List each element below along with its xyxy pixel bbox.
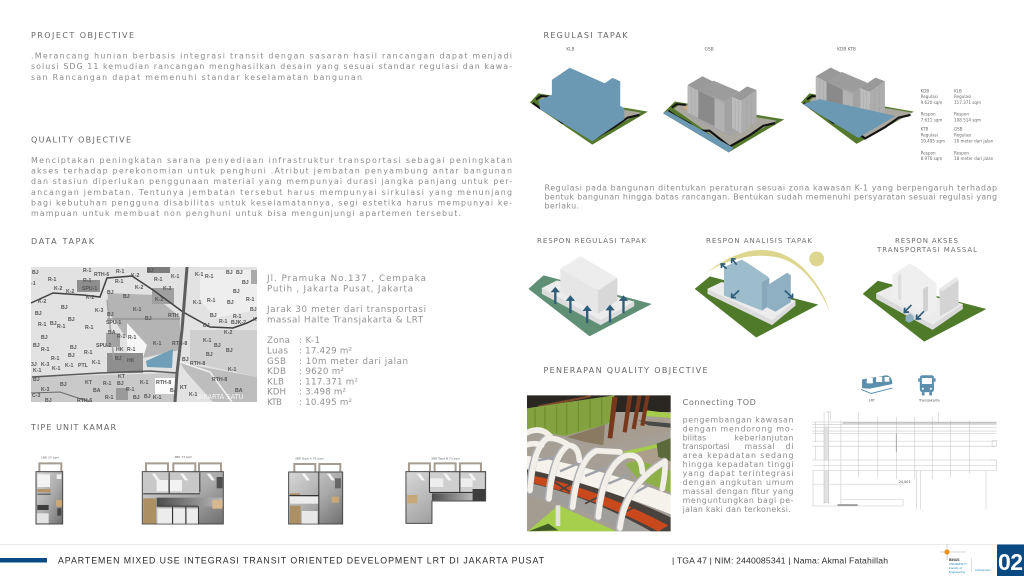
text block: connecting TOD description: yang dapat terintegrasi bbox=[683, 469, 794, 478]
map: site zoning: BJ bbox=[233, 289, 240, 295]
heading: respon akses transportasi massal bbox=[876, 237, 977, 254]
map: site zoning: SPU-2 bbox=[96, 343, 111, 349]
text block: site data list bbox=[267, 336, 408, 408]
map: site zoning: R-1 bbox=[117, 334, 125, 340]
text block: connecting TOD description: pengembangan kawasan bbox=[683, 415, 794, 424]
text block: site address and distance bbox=[266, 274, 426, 325]
text block: site data list: KDH bbox=[267, 388, 286, 398]
map: site zoning: R-1 bbox=[115, 279, 123, 285]
text block: connecting TOD description: hingga kepadatan tinggi bbox=[683, 460, 794, 469]
model: KLB bbox=[530, 46, 648, 145]
map: site zoning: R-1 bbox=[127, 347, 135, 353]
text block: connecting TOD description: menguntungkan bagi pe- bbox=[683, 496, 794, 505]
heading: penerapan quality objective: PENERAPAN QUALITY OBJECTIVE bbox=[544, 366, 708, 375]
map: site zoning: BJ bbox=[68, 317, 75, 323]
map: site zoning: K-1 bbox=[171, 274, 179, 280]
floor plans bbox=[36, 455, 486, 524]
map: site zoning: BJ bbox=[117, 381, 124, 387]
table: regulation values: Regulasi bbox=[954, 94, 971, 99]
floor plan: unit 4: 3BR Type B 73 sqm bbox=[431, 457, 460, 461]
model: KDB KTB: KDB KTB bbox=[837, 46, 856, 52]
map: site zoning: K-1 bbox=[193, 300, 201, 306]
map: site zoning: BJ bbox=[226, 348, 233, 354]
text block: project objective body: .Merancang hunian berbasis integrasi transit dengan sasaran hasil rancangan dapat menjadi bbox=[31, 52, 512, 61]
text block: regulation description: bentuk bangunan hingga batas rancangan. Bentukan sudah memenuhi persyaratan sesuai regulasi yang bbox=[544, 192, 997, 202]
map: site zoning: HK bbox=[116, 347, 124, 353]
map: site zoning: BJ bbox=[236, 270, 243, 276]
diagram: respon akses transportasi bbox=[863, 264, 986, 342]
map: site zoning: K-3 bbox=[41, 362, 49, 368]
map: site zoning: K-2 bbox=[135, 285, 143, 291]
map: site zoning: K-1 bbox=[153, 341, 161, 347]
map: site zoning: K-2 bbox=[131, 273, 139, 279]
map: site zoning: BJ bbox=[250, 307, 257, 313]
map: site zoning: R-1 bbox=[128, 335, 136, 341]
panel: respon diagrams bbox=[528, 237, 986, 342]
map: site zoning: SPU-1 bbox=[106, 320, 121, 326]
map: site zoning: BJ bbox=[182, 357, 189, 363]
table: regulation values: 10 meter dari jalan bbox=[954, 139, 994, 144]
model: GSB bbox=[663, 46, 784, 152]
label: dimension: 24,001 bbox=[899, 480, 911, 484]
map: site zoning: BJ bbox=[50, 321, 57, 327]
table: regulation values: KTB bbox=[921, 127, 928, 132]
map: site zoning: BJ bbox=[206, 352, 213, 358]
floor plan: unit 2: 3BR 73 sqm bbox=[174, 455, 192, 459]
map: site zoning: R-1 bbox=[85, 325, 93, 331]
text block: connecting TOD description: massal bbox=[744, 442, 775, 451]
map: site zoning: K bbox=[253, 317, 257, 323]
text block: site address and distance: Jl. Pramuka No.137 , Cempaka bbox=[266, 274, 426, 284]
heading: connecting TOD: Connecting TOD bbox=[683, 398, 756, 407]
text block: quality objective body: ancangan jembatan. Tentunya jembatan tersebut harus mempunyai sirkulasi yang menunjang bbox=[31, 188, 512, 197]
heading: respon akses transportasi massal: RESPON AKSES bbox=[895, 237, 959, 245]
map: site zoning: BJ bbox=[33, 377, 40, 383]
map: site zoning: BJ bbox=[107, 290, 114, 296]
map: site zoning: R-1 bbox=[48, 277, 56, 283]
text block: site data list: : 17.429 m² bbox=[299, 346, 352, 356]
text block: project objective body: solusi SDG 11 kemudian rancangan menghasilkan desain yang sesuai standar regulasi dan kawa- bbox=[31, 62, 512, 71]
table: regulation values: Respon bbox=[954, 150, 969, 155]
map: site zoning: SPU-1 bbox=[82, 286, 97, 292]
map: site zoning: JAKARTA SATU bbox=[196, 393, 244, 401]
table: regulation values: 18 meter dari jalan bbox=[954, 156, 994, 161]
table: regulation values: Regulasi bbox=[921, 133, 938, 138]
text block: connecting TOD description: di bbox=[785, 442, 794, 451]
text block: connecting TOD description: jalan kaki dan terkoneksi. bbox=[682, 505, 791, 514]
map: site zoning: R-1 bbox=[246, 297, 254, 303]
map: site zoning: 3J bbox=[31, 362, 37, 368]
text block: connecting TOD description: bilitas bbox=[683, 433, 706, 442]
map: site zoning: BJ bbox=[33, 343, 40, 349]
label: LRT: LRT bbox=[869, 399, 876, 403]
map: site zoning: BJ bbox=[210, 313, 217, 319]
panel: penerapan quality objective bbox=[525, 366, 996, 534]
table: regulation values: 8.976 sqm bbox=[921, 156, 942, 161]
map: site zoning: BJ bbox=[68, 353, 75, 359]
table: regulation values: 108.514 sqm bbox=[954, 117, 981, 122]
text block: connecting TOD description bbox=[682, 415, 794, 514]
map: site zoning: K-2 bbox=[38, 299, 46, 305]
logo: BINUS University bbox=[940, 544, 991, 574]
text block: quality objective body: dan stasiun diperlukan penggunaan material yang mempunyai durasi jangka panjang untuk per- bbox=[31, 177, 512, 186]
footer accent bar bbox=[0, 558, 47, 562]
table: regulation values: Respon bbox=[954, 112, 969, 117]
text block: site address and distance: Putih , Jakarta Pusat, Jakarta bbox=[267, 284, 413, 294]
map: site zoning: RTH-6 bbox=[77, 398, 92, 404]
map: site zoning: K-1 bbox=[228, 367, 236, 373]
table: regulation values: 117.371 sqm bbox=[954, 100, 981, 105]
text block: project objective body bbox=[31, 52, 512, 82]
map: site zoning: K-1 bbox=[92, 360, 100, 366]
logo: BINUS University: UNIVERSITY bbox=[949, 562, 967, 566]
drawing: bridge section bbox=[812, 412, 996, 509]
text block: project objective body: san Rancangan dapat memenuhi standar keselamatan bangunan bbox=[31, 73, 362, 82]
table: regulation values: 9.620 sqm bbox=[921, 100, 942, 105]
floor plan: unit 1: 1BR 37 sqm bbox=[41, 455, 59, 459]
map: site zoning: K-1 bbox=[65, 363, 73, 369]
map: site zoning: K-1 bbox=[203, 338, 211, 344]
site highlight bbox=[146, 349, 173, 368]
text block: site data list: KDB bbox=[267, 367, 286, 377]
panel: project objective bbox=[31, 31, 512, 82]
text block: site data list: KLB bbox=[267, 377, 284, 387]
map: site zoning: K-1 bbox=[140, 380, 148, 386]
panel: tipe unit kamar bbox=[30, 423, 486, 524]
table: regulation values: Respon bbox=[921, 112, 936, 117]
map: site zoning: K-3 bbox=[95, 308, 103, 314]
map: site zoning: RTH bbox=[168, 313, 179, 319]
heading: project objective: PROJECT OBJECTIVE bbox=[31, 31, 134, 40]
map: site zoning: C-3 bbox=[32, 393, 40, 399]
map: site zoning: R-1 bbox=[84, 350, 92, 356]
map: site zoning: R-1 bbox=[219, 319, 227, 325]
table: regulation values: 7.611 sqm bbox=[921, 117, 942, 122]
map: site zoning: -1 bbox=[31, 281, 36, 287]
map: site zoning: PTL bbox=[78, 363, 89, 369]
map: site zoning: BJ bbox=[226, 270, 233, 276]
map: site zoning: R-1 bbox=[83, 268, 91, 274]
text block: quality objective body: mampuan untuk membuat non penghuni untuk bisa mengunjungi apartemen tersebut. bbox=[31, 209, 461, 218]
text block: site data list: GSB bbox=[267, 357, 286, 367]
map: site zoning: KT bbox=[180, 385, 188, 391]
map: site zoning: R-1 bbox=[126, 387, 134, 393]
model: KLB: KLB bbox=[566, 46, 575, 52]
footer student info: | TGA 47 | NIM: 2440085341 | Nama: Akmal Fatahillah bbox=[672, 556, 888, 566]
map: site zoning: R-1 bbox=[57, 324, 65, 330]
map: site zoning: BJ bbox=[115, 356, 122, 362]
map: site zoning: BJ bbox=[123, 294, 130, 300]
heading: respon akses transportasi massal: TRANSPORTASI MASSAL bbox=[876, 246, 977, 254]
map: site zoning: BJ bbox=[35, 311, 42, 317]
diagram: respon regulasi bbox=[528, 256, 652, 336]
text block: site data list: : 10m meter dari jalan bbox=[299, 357, 408, 367]
heading: respon analisis tapak: RESPON ANALISIS TAPAK bbox=[706, 237, 812, 245]
map: site zoning: BJ bbox=[144, 394, 151, 400]
map: site zoning: K-2 bbox=[224, 330, 232, 336]
map: site zoning: R-1 bbox=[83, 278, 91, 284]
text block: site data list: : 3.498 m² bbox=[299, 388, 346, 398]
diagram: respon analisis bbox=[695, 250, 829, 338]
text block: site data list: Luas bbox=[267, 346, 288, 356]
text block: site address and distance: massal Halte Transjakarta & LRT bbox=[267, 315, 424, 325]
map: site zoning: K-1 bbox=[33, 368, 41, 374]
heading: data tapak: DATA TAPAK bbox=[31, 237, 95, 246]
text block: regulation description bbox=[544, 184, 997, 210]
map: site zoning: BJ bbox=[145, 316, 152, 322]
floor plan: unit 3: 3BR Type A 76 sqm bbox=[295, 457, 324, 461]
text block: connecting TOD description: keberlanjutan bbox=[734, 433, 794, 442]
model: KDB KTB bbox=[801, 46, 914, 144]
map: site zoning: BJ bbox=[203, 323, 210, 329]
map: site zoning: R-1 bbox=[207, 298, 215, 304]
map: site zoning: K-1 bbox=[195, 272, 203, 278]
page number: 02 bbox=[998, 549, 1023, 575]
icon: Transjakarta bus bbox=[918, 375, 936, 395]
table: regulation values: GSB bbox=[954, 127, 963, 132]
map: site zoning: K-2 bbox=[66, 289, 74, 295]
map: site zoning: BJ bbox=[214, 343, 221, 349]
map: site zoning: BA bbox=[108, 330, 116, 336]
map: site zoning: BJ bbox=[41, 335, 48, 341]
map: site zoning: K-2 bbox=[54, 286, 62, 292]
text block: quality objective body: bagi kebutuhan pengguna disabilitas untuk keselamatannya, segi estetika harus mempunyai ke- bbox=[31, 198, 512, 207]
map: site zoning: BJK-2 bbox=[231, 320, 246, 326]
map: site zoning: BJ bbox=[61, 305, 68, 311]
diagrams: site regulation models bbox=[530, 46, 914, 152]
icon: LRT train bbox=[861, 375, 892, 393]
map: site zoning: RTH-8 bbox=[212, 377, 227, 383]
text block: site data list: : 117.371 m² bbox=[299, 377, 358, 387]
map: site zoning: BJ bbox=[70, 345, 77, 351]
panel: regulasi tapak bbox=[530, 31, 997, 210]
text block: quality objective body: Menciptakan peningkatan sarana penyediaan infrastruktur transportasi sebagai peningkatan bbox=[31, 156, 512, 165]
map: site zoning: R-1 bbox=[103, 381, 111, 387]
map: site zoning: K-1 bbox=[153, 395, 161, 401]
logo: BINUS University: Architecture bbox=[975, 568, 991, 572]
model: GSB: GSB bbox=[705, 46, 714, 52]
floor plan: unit 1 bbox=[36, 455, 63, 524]
text block: site data list: : 10.495 m² bbox=[299, 398, 352, 408]
table: regulation values: Regulasi bbox=[921, 94, 938, 99]
map: site zoning: BA bbox=[93, 388, 101, 394]
map: site zoning bbox=[31, 267, 257, 404]
map: site zoning: K-2 bbox=[155, 297, 163, 303]
map: site zoning: R-1 bbox=[105, 395, 113, 401]
map: site zoning: BJ bbox=[107, 312, 114, 318]
map: site zoning: RTH-6 bbox=[94, 272, 109, 278]
panel: data tapak bbox=[31, 237, 426, 408]
logo: BINUS University: BINUS bbox=[949, 558, 960, 562]
map: site zoning: RTH-8 bbox=[172, 341, 187, 347]
heading: regulasi tapak: REGULASI TAPAK bbox=[544, 31, 628, 40]
text block: connecting TOD description: dengan angkutan umum bbox=[683, 478, 794, 487]
text block: site data list: KTB bbox=[267, 398, 282, 408]
map: site zoning: BJ bbox=[133, 395, 140, 401]
map: site zoning: RTH-8 bbox=[156, 380, 171, 386]
logo: BINUS University: Faculty of bbox=[949, 566, 962, 570]
text block: site address and distance: Jarak 30 meter dari transportasi bbox=[266, 305, 426, 315]
heading: tipe unit kamar: TIPE UNIT KAMAR bbox=[30, 423, 116, 432]
map: site zoning: R-1 bbox=[41, 347, 49, 353]
map: site zoning: BA bbox=[235, 388, 243, 394]
map: site zoning: KT bbox=[118, 374, 126, 380]
text block: connecting TOD description: transportasi bbox=[683, 442, 730, 451]
text block: connecting TOD description: area kepadatan sedang bbox=[683, 451, 794, 460]
map: site zoning: BJ bbox=[170, 388, 177, 394]
map: site zoning: BJ bbox=[60, 382, 67, 388]
table: regulation values: Respon bbox=[921, 150, 936, 155]
heading: quality objective: QUALITY OBJECTIVE bbox=[31, 136, 131, 145]
map: site zoning: BJ bbox=[32, 270, 39, 276]
label: Transjakarta: Transjakarta bbox=[918, 399, 940, 403]
map: site zoning: K-1 bbox=[133, 307, 141, 313]
text block: regulation description: Regulasi pada bangunan ditentukan peraturan sesuai zona kawasan K-1 yang berpengaruh terhadap bbox=[544, 184, 997, 193]
table: regulation values: 10.495 sqm bbox=[921, 139, 945, 144]
map: site zoning: R-1 bbox=[51, 356, 59, 362]
table: regulation values: Regulasi bbox=[954, 133, 971, 138]
floor plan: unit 4 bbox=[406, 457, 486, 523]
text block: connecting TOD description: dengan mendorong mo- bbox=[683, 424, 794, 433]
panel: quality objective bbox=[31, 136, 512, 218]
map: site zoning: R-1 bbox=[205, 274, 213, 280]
text block: site data list: : 9620 m² bbox=[299, 367, 344, 377]
map: site zoning: K-1 bbox=[189, 392, 197, 398]
text block: site data list: : K-1 bbox=[299, 336, 320, 346]
map: site zoning: K-1 bbox=[52, 366, 60, 372]
table: regulation values: KDB bbox=[921, 88, 929, 93]
text block: quality objective body: akses terhadap perekonomian untuk penghuni .Atribut jembatan penyambung antar bangunan bbox=[31, 167, 512, 176]
map: site zoning: K-2 bbox=[86, 295, 94, 301]
footer bbox=[0, 544, 1024, 576]
table: regulation values: KLB bbox=[954, 88, 962, 93]
logo: BINUS University: Engineering bbox=[949, 570, 965, 574]
map: site zoning: R-1 bbox=[116, 269, 124, 275]
map: site zoning: R-1 bbox=[154, 277, 162, 283]
footer title: APARTEMEN MIXED USE INTEGRASI TRANSIT ORIENTED DEVELOPMENT LRT DI JAKARTA PUSAT bbox=[58, 556, 545, 566]
map: site zoning: R-1 bbox=[38, 322, 46, 328]
map: site zoning: BJ bbox=[147, 268, 154, 274]
map: site zoning: HK bbox=[127, 358, 135, 364]
floor plan: unit 3 bbox=[289, 457, 343, 524]
text block: connecting TOD description: massal dengan fitur yang bbox=[683, 487, 794, 496]
map: site zoning: R-1 bbox=[233, 314, 241, 320]
map: site zoning: BJ bbox=[242, 280, 249, 286]
photo: connecting bridge render bbox=[525, 392, 673, 534]
floor plan: unit 2 bbox=[142, 455, 223, 524]
text block: quality objective body bbox=[31, 156, 512, 218]
text block: regulation description: berlaku. bbox=[544, 202, 579, 210]
heading: respon regulasi tapak: RESPON REGULASI TAPAK bbox=[537, 237, 646, 245]
map: site zoning: BJ bbox=[45, 398, 52, 404]
map: site zoning: K-3 bbox=[163, 286, 171, 292]
map: site zoning: KT bbox=[85, 380, 93, 386]
map: site zoning: RTH-8 bbox=[190, 361, 205, 367]
map: site zoning: K-3 bbox=[41, 387, 49, 393]
table: regulation values bbox=[921, 88, 994, 161]
text block: site data list: Zona bbox=[267, 336, 290, 346]
map: site zoning: BJ bbox=[227, 300, 234, 306]
